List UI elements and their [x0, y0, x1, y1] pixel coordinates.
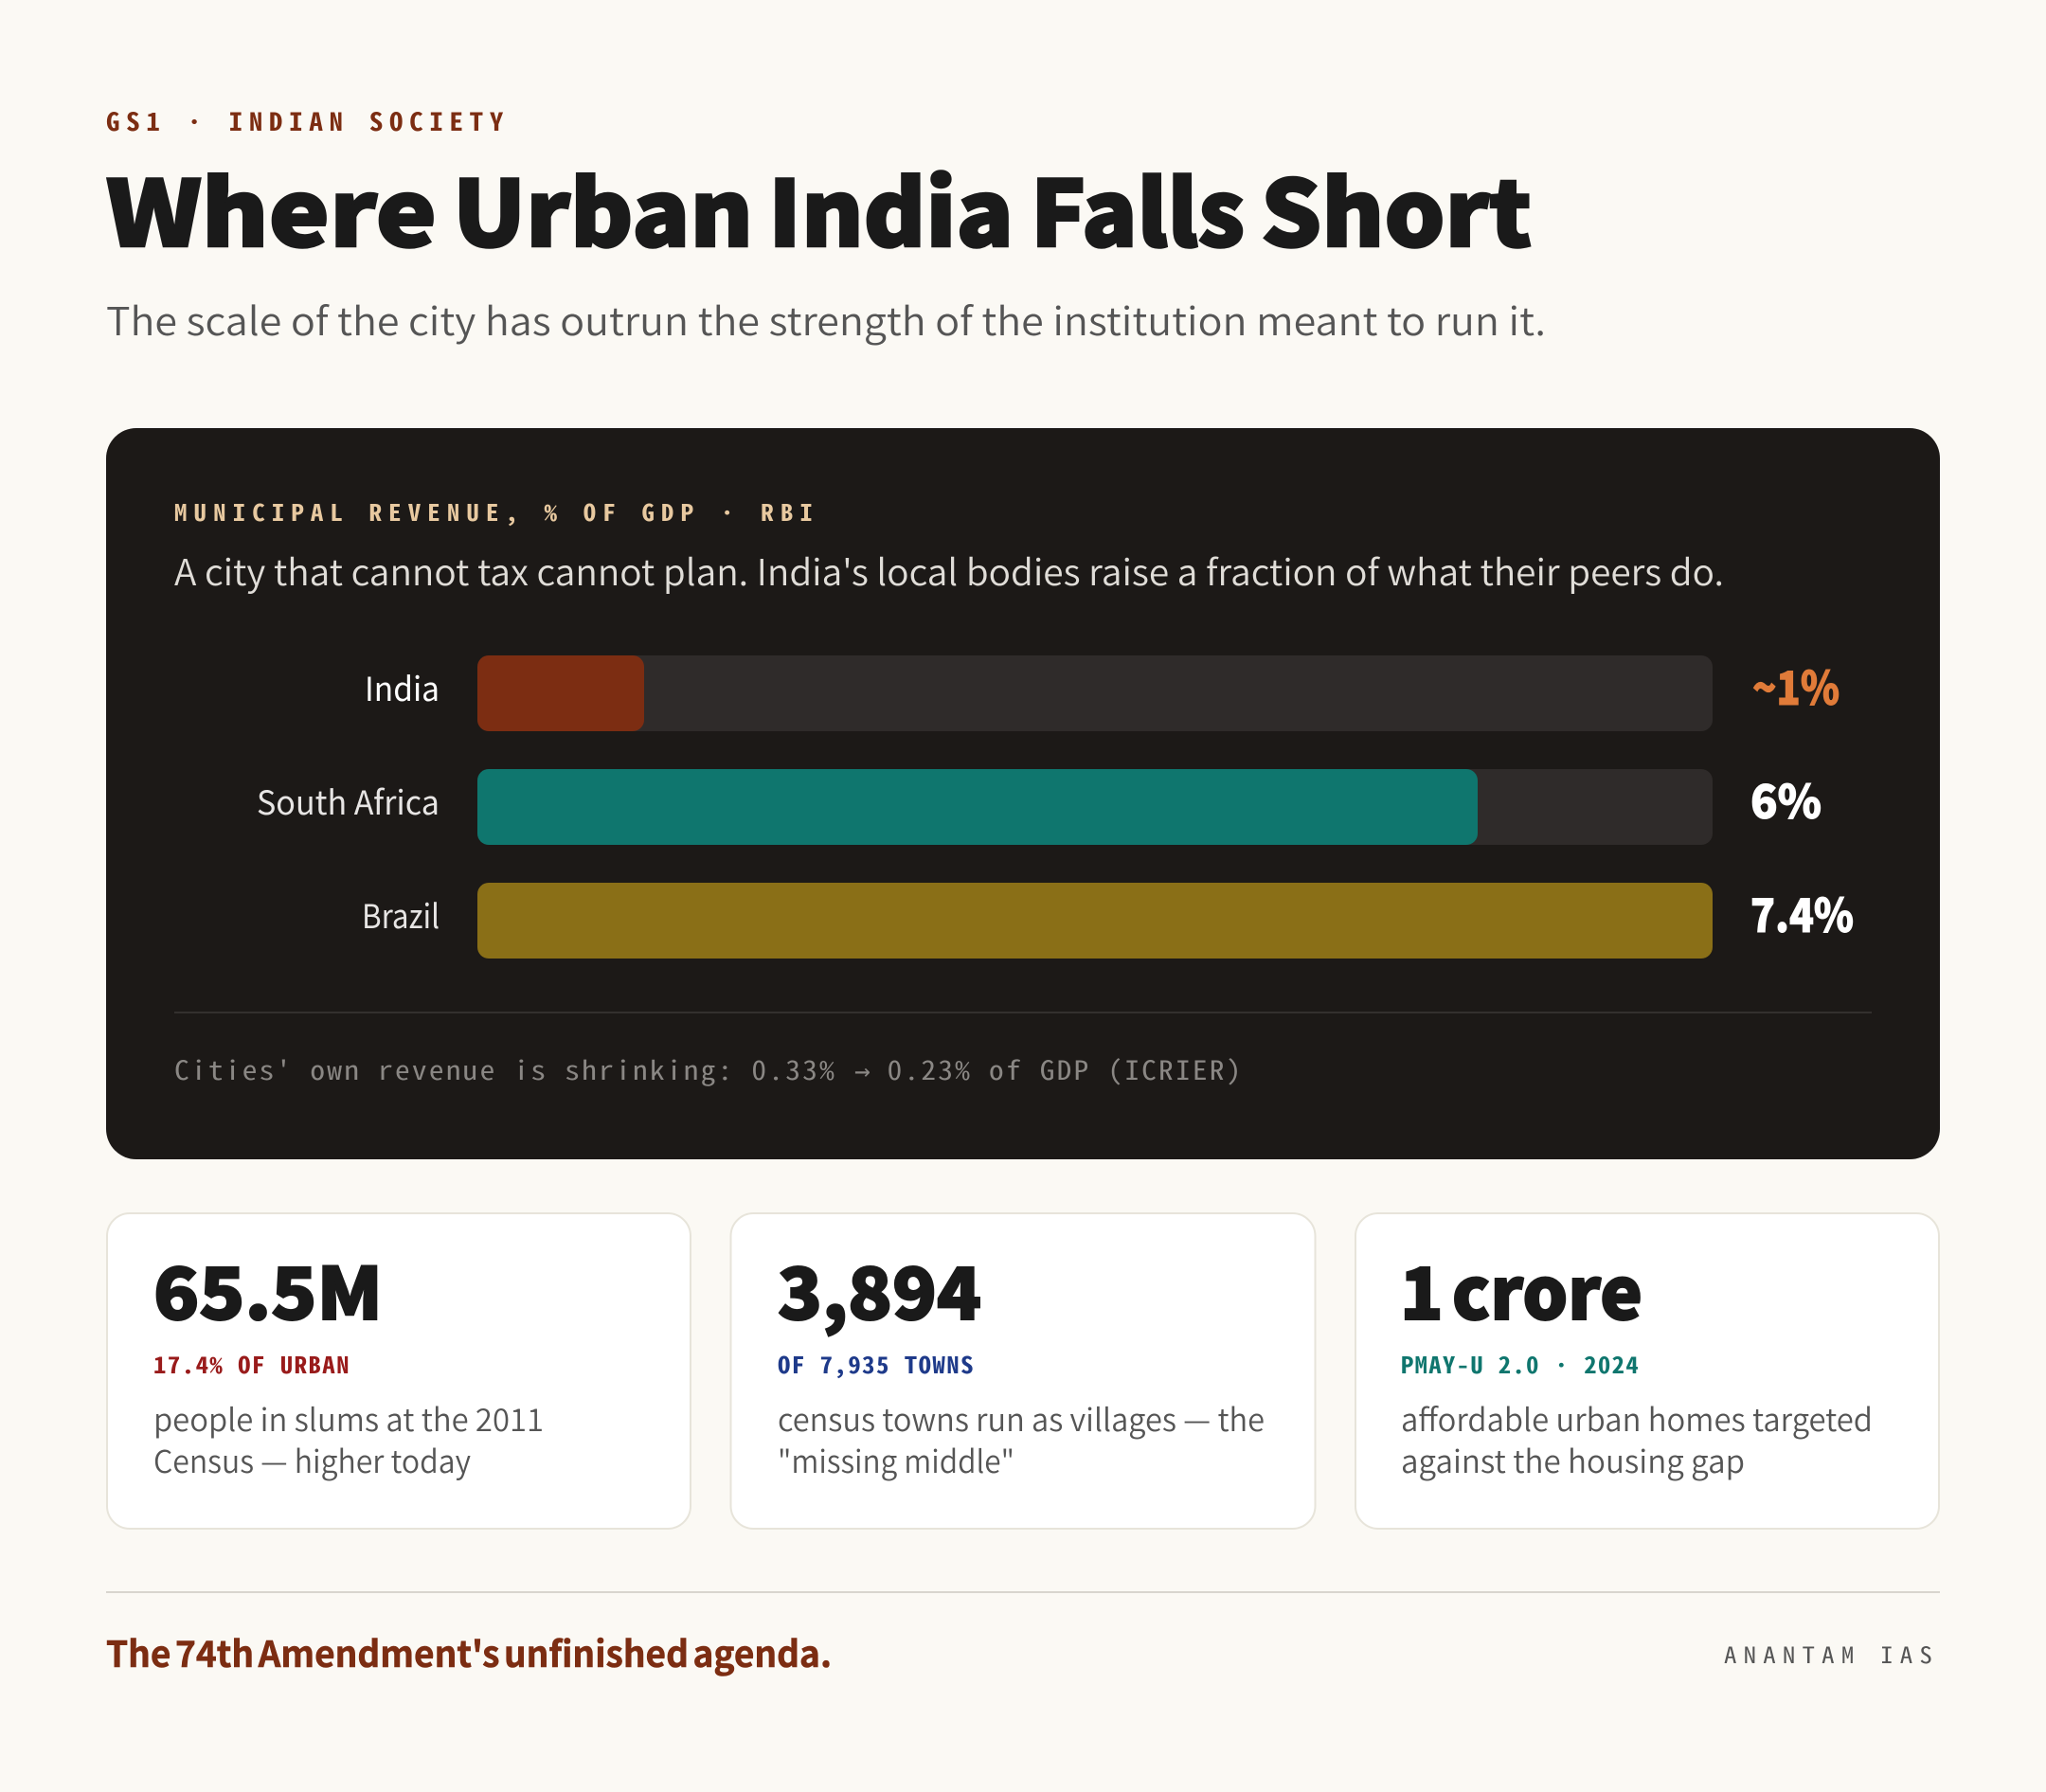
bar row: India: ~1%	[1752, 652, 1840, 719]
stat card: census towns	[731, 1213, 1315, 1529]
panel footnote: →	[854, 1055, 870, 1086]
title: Urban	[453, 141, 753, 273]
title: India	[768, 141, 1014, 273]
panel lead text: A city that cannot tax cannot plan. India's local bodies raise a fraction of what their peers do.	[174, 544, 1724, 596]
bar row: India	[365, 652, 1840, 731]
stat card: PMAY-U homes: against the housing gap	[1401, 1437, 1745, 1482]
footer tagline: The 74th Amendment's unfinished agenda.	[106, 1625, 832, 1677]
stat card: PMAY-U homes: PMAY-U 2.0 · 2024	[1401, 1347, 1640, 1380]
title: Falls	[1031, 141, 1245, 273]
subtitle: The scale of the city has outrun the strength of the institution meant to run it.	[106, 290, 1546, 347]
footer brand: ANANTAM IAS	[1724, 1637, 1939, 1670]
panel footnote	[174, 1050, 1244, 1088]
stat card: PMAY-U homes	[1355, 1213, 1939, 1529]
title	[106, 141, 1532, 273]
stat card: PMAY-U homes: 1 crore	[1400, 1236, 1642, 1340]
title: Where	[106, 141, 437, 273]
bar row: Brazil	[362, 879, 1854, 959]
bar row: Brazil: Brazil	[362, 890, 440, 939]
stat card: slums: 65.5M	[153, 1236, 383, 1340]
bar row: South Africa: 6%	[1750, 765, 1822, 833]
stat card: census towns: "missing middle"	[778, 1437, 1014, 1482]
panel footnote: 0.23% of GDP (ICRIER)	[888, 1050, 1244, 1088]
bar row: India: India	[365, 663, 440, 711]
bar row: South Africa	[257, 765, 1822, 845]
stat card: PMAY-U homes: affordable urban homes targeted	[1401, 1395, 1873, 1441]
stat card: census towns: 3,894	[778, 1236, 981, 1340]
panel footnote: Cities' own revenue is shrinking: 0.33%	[174, 1050, 836, 1088]
stat card: census towns: OF 7,935 TOWNS	[778, 1347, 975, 1380]
stat card: slums: Census — higher today	[153, 1437, 471, 1482]
panel label: MUNICIPAL REVENUE, % OF GDP · RBI	[174, 494, 819, 528]
title: Short	[1261, 141, 1532, 273]
stat card: slums: 17.4% OF URBAN	[153, 1347, 350, 1380]
panel: municipal revenue chart	[106, 428, 1940, 1159]
stat card: slums: people in slums at the 2011	[153, 1395, 544, 1441]
bar row: South Africa: South Africa	[257, 777, 440, 825]
eyebrow label: GS1 · INDIAN SOCIETY	[106, 103, 510, 138]
bar row: Brazil: 7.4%	[1750, 879, 1854, 946]
stat card: slums	[107, 1213, 691, 1529]
stat card: census towns: census towns run as villages — the	[778, 1395, 1265, 1441]
